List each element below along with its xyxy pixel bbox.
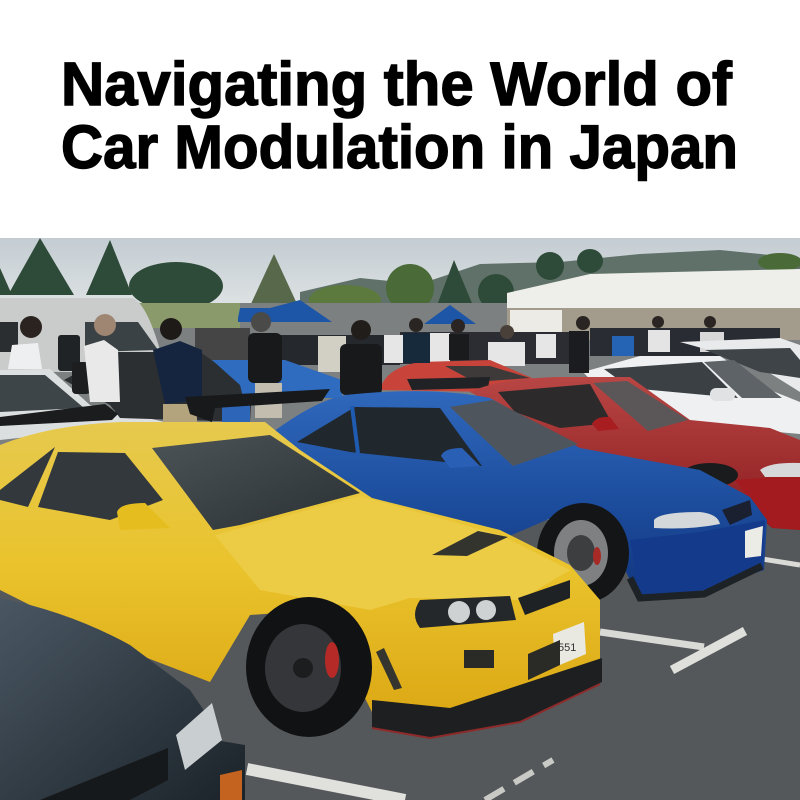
standing people in the distance [403, 316, 716, 373]
wheel: blue car [537, 503, 629, 603]
distant hills [300, 250, 800, 310]
white van [0, 298, 160, 372]
person 4 [248, 312, 282, 418]
front splitter [372, 658, 602, 738]
car: dark navy foreground [0, 598, 245, 800]
license plate [553, 622, 586, 667]
title: Car Modulation in Japan [61, 113, 738, 181]
car: distant white left [0, 369, 165, 440]
sky [0, 238, 800, 310]
title [61, 50, 738, 181]
blue canopies [238, 300, 332, 322]
car: black [64, 352, 252, 422]
car: white [583, 356, 800, 434]
person 3 [153, 318, 202, 422]
photo: car meet in Japan [0, 238, 800, 800]
tree line [0, 238, 800, 315]
car: distant blue [212, 360, 342, 425]
car: distant orange-red [380, 360, 532, 392]
car: far right white [680, 338, 800, 392]
asphalt [0, 520, 800, 800]
spoiler: left [0, 404, 118, 426]
headlights [415, 596, 516, 628]
background lot [0, 303, 800, 603]
car: red [470, 377, 800, 530]
person 5 [340, 320, 382, 395]
grille [518, 580, 570, 615]
crowd background [195, 328, 780, 372]
wheel: yellow car [246, 597, 372, 737]
license plate: 551 [558, 642, 576, 654]
spoiler: centre [185, 389, 330, 422]
white tent [507, 269, 800, 340]
hood scoop [432, 531, 508, 556]
person 1 [8, 316, 42, 369]
title: Navigating the World of [61, 50, 733, 118]
person 2 [72, 314, 120, 402]
car: yellow [0, 422, 602, 738]
car: blue [260, 391, 767, 603]
standing people [8, 312, 382, 422]
